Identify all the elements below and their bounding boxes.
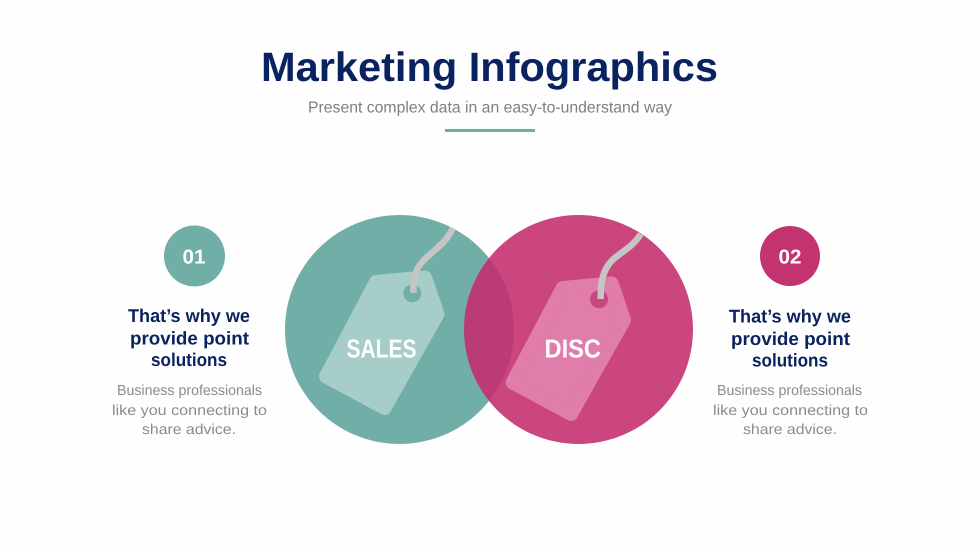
label: sales: SALES — [346, 334, 416, 364]
heading left: provide point — [130, 328, 249, 348]
badge 02: 02 — [778, 246, 802, 268]
heading left: solutions — [151, 349, 227, 370]
body text left: like you connecting to — [112, 403, 267, 419]
circle: sales — [285, 215, 514, 444]
heading left: That’s why we — [128, 305, 250, 326]
body text left — [112, 383, 267, 438]
heading right: provide point — [731, 328, 850, 349]
heading right: That’s why we — [729, 306, 851, 326]
icon: sales tag — [326, 228, 453, 408]
heading right: solutions — [752, 350, 828, 370]
body text left: share advice. — [142, 422, 236, 438]
heading right — [729, 306, 851, 370]
body text right — [713, 383, 868, 438]
label: disc: DISC — [544, 334, 601, 364]
body text right: share advice. — [743, 422, 837, 438]
panel: left column 01 — [112, 226, 267, 438]
heading left — [128, 305, 250, 370]
icon: disc tag — [513, 234, 641, 414]
body text right: Business professionals — [717, 383, 862, 399]
body text right: like you connecting to — [713, 403, 868, 419]
badge 02 — [760, 226, 820, 286]
subtitle: Present complex data in an easy-to-understand way — [308, 100, 672, 116]
title: Marketing Infographics — [261, 44, 718, 90]
panel: right column 02 — [713, 226, 868, 438]
venn diagram — [285, 215, 693, 444]
circle: disc — [464, 215, 693, 444]
badge 01: 01 — [182, 246, 206, 268]
badge 01 — [164, 226, 225, 286]
body text left: Business professionals — [117, 383, 262, 399]
title underline accent — [445, 129, 535, 132]
